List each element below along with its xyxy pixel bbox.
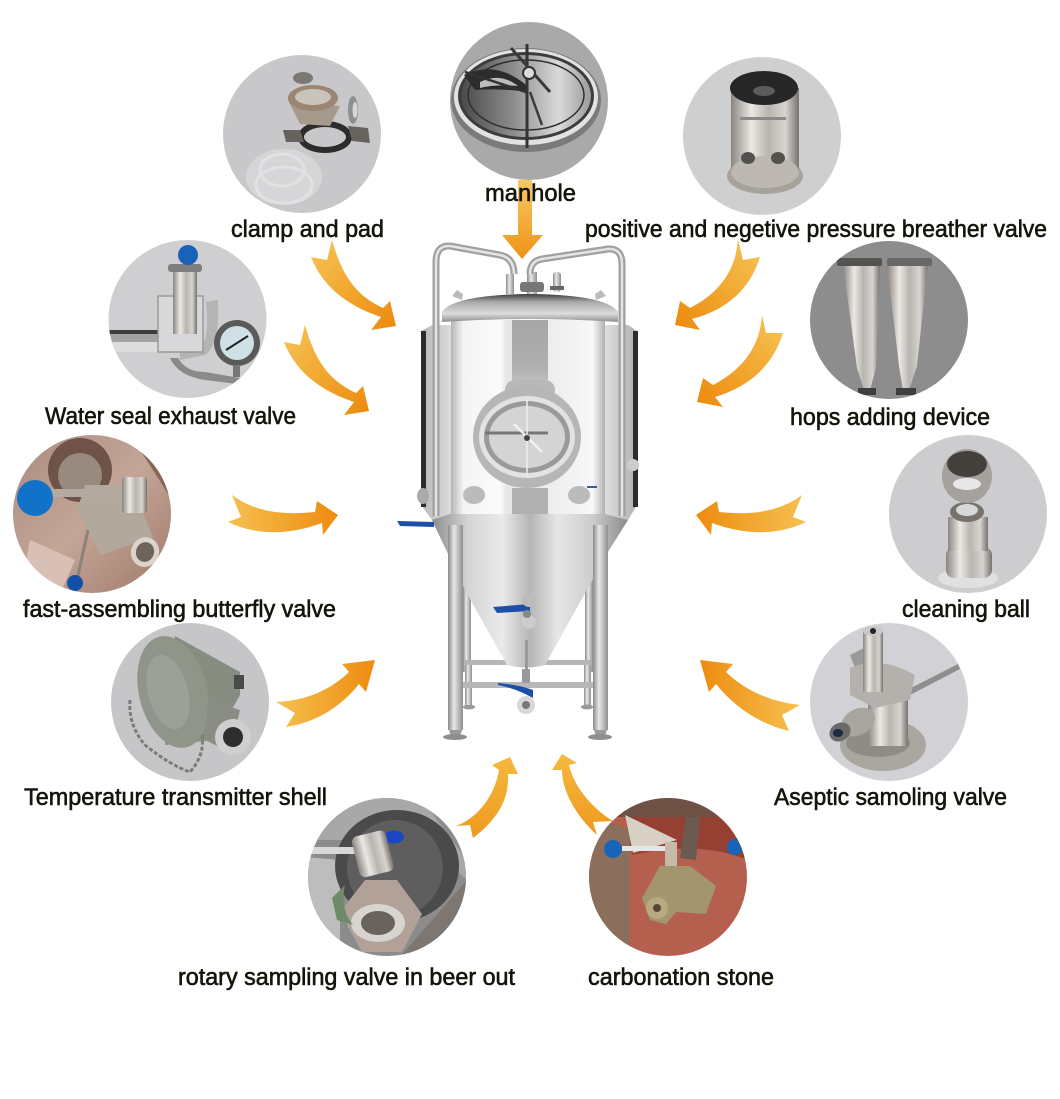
back legs	[463, 560, 593, 710]
panel: rotary sampling valve	[178, 757, 518, 991]
manway	[473, 386, 581, 488]
label: butterfly valve: fast-assembling butterfly valve	[23, 596, 336, 623]
arrow: carbonation stone	[552, 754, 613, 835]
photo: clamp and pad	[222, 54, 382, 214]
label: breather valve: positive and negetive pressure breather valve	[585, 216, 1047, 243]
central fermentation tank	[397, 246, 639, 740]
jacket	[421, 325, 637, 520]
cone	[432, 514, 628, 668]
body	[451, 320, 605, 514]
panel: hops adding device	[697, 240, 990, 431]
arrow: manhole	[502, 180, 543, 259]
label: water seal exhaust valve: Water seal exhaust valve	[45, 403, 296, 430]
arrow: clamp and pad	[311, 240, 396, 330]
arrow: aseptic sampling valve	[700, 660, 800, 731]
photo: breather valve	[682, 56, 842, 216]
panel: breather valve	[585, 56, 1047, 330]
blue valve handles	[397, 521, 533, 698]
front legs	[443, 525, 612, 740]
panel: butterfly valve	[12, 434, 338, 623]
arrow: butterfly valve	[228, 495, 338, 535]
photo: water seal exhaust valve	[108, 240, 268, 400]
photo: carbonation stone	[588, 797, 748, 957]
label: cleaning ball: cleaning ball	[902, 596, 1030, 623]
arrow: hops adding device	[697, 315, 783, 407]
label: carbonation stone: carbonation stone	[588, 964, 774, 991]
label: manhole: manhole	[485, 180, 576, 207]
panel: carbonation stone	[552, 754, 774, 991]
photo: butterfly valve	[12, 434, 172, 594]
dome	[442, 294, 618, 322]
photo: temperature transmitter shell	[110, 622, 270, 782]
arrow: temperature transmitter shell	[276, 660, 375, 727]
arrow: breather valve	[675, 239, 760, 330]
arrow: water seal exhaust valve	[284, 325, 369, 415]
label: aseptic sampling valve: Aseptic samoling valve	[774, 784, 1007, 811]
glycol pipes	[436, 246, 622, 516]
photo: hops adding device	[809, 240, 969, 400]
cross bars	[462, 660, 596, 688]
arrow: cleaning ball	[696, 495, 806, 535]
clamps on shell	[417, 459, 639, 504]
label: hops adding device: hops adding device	[790, 404, 990, 431]
panel: manhole	[450, 22, 610, 259]
panel: clamp and pad	[222, 54, 396, 330]
panel: cleaning ball	[696, 434, 1049, 623]
photo: manhole	[450, 22, 610, 182]
arrow: rotary sampling valve	[456, 757, 518, 838]
label: rotary sampling valve: rotary sampling valve in beer out	[178, 964, 515, 991]
photo: aseptic sampling valve	[810, 622, 970, 782]
label: clamp and pad: clamp and pad	[231, 216, 384, 243]
panel: aseptic sampling valve	[700, 622, 1007, 811]
label: temperature transmitter shell: Temperature transmitter shell	[24, 784, 327, 811]
lower valves	[517, 593, 536, 714]
photo: rotary sampling valve	[307, 797, 467, 957]
panel: water seal exhaust valve	[45, 240, 369, 430]
panel: temperature transmitter shell	[24, 622, 375, 811]
top fittings	[506, 272, 564, 294]
photo: cleaning ball	[889, 434, 1049, 594]
